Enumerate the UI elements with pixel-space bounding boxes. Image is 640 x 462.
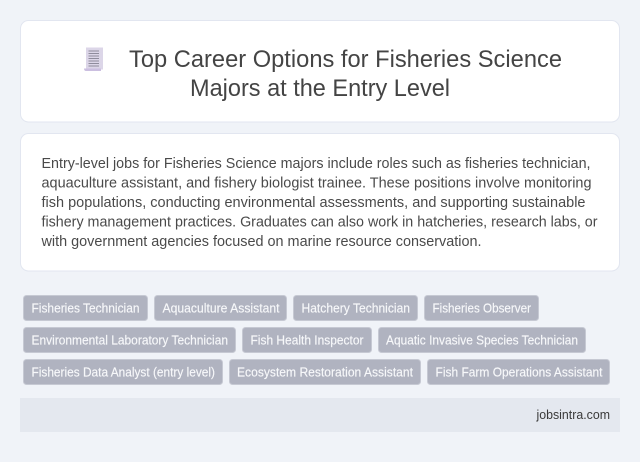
tag: Hatchery Technician	[294, 296, 418, 320]
tag: Aquatic Invasive Species Technician: Aquatic Invasive Species Technician	[386, 332, 578, 348]
title: Majors at the Entry Level	[190, 75, 450, 102]
title	[129, 46, 562, 102]
panel: header	[20, 20, 620, 122]
tag: Aquaculture Assistant: Aquaculture Assistant	[162, 300, 280, 316]
description text	[41, 155, 598, 250]
tag: Fisheries Data Analyst (entry level)	[24, 360, 222, 384]
tag: Aquatic Invasive Species Technician	[378, 328, 586, 352]
tag: Hatchery Technician: Hatchery Technician	[302, 300, 410, 316]
panel: description	[20, 134, 620, 271]
footer source text: jobsintra.com	[536, 408, 610, 422]
description text: fishery management practices. Graduates can also work in hatcheries, research labs, or	[42, 214, 598, 230]
tag: Fish Farm Operations Assistant: Fish Farm Operations Assistant	[436, 364, 603, 380]
description text: with government agencies focused on marine resource conservation.	[41, 233, 481, 250]
tag: Aquaculture Assistant	[154, 296, 286, 320]
description text: aquaculture assistant, and fishery biologist trainee. These positions involve monitoring	[42, 174, 592, 192]
tag: Fish Farm Operations Assistant	[428, 360, 610, 384]
tag: Fisheries Technician	[24, 296, 148, 320]
tag: Ecosystem Restoration Assistant: Ecosystem Restoration Assistant	[237, 364, 413, 380]
tag: Fisheries Technician: Fisheries Technician	[32, 300, 140, 316]
panel: job tags	[24, 296, 610, 384]
tag: Environmental Laboratory Technician	[24, 328, 236, 352]
tag: Ecosystem Restoration Assistant	[230, 360, 420, 384]
tag: Fisheries Observer: Fisheries Observer	[432, 300, 532, 316]
icon: paper scroll	[84, 48, 103, 71]
tag: Environmental Laboratory Technician: Environmental Laboratory Technician	[32, 332, 228, 348]
title: Top Career Options for Fisheries Science	[129, 46, 562, 73]
tag: Fisheries Data Analyst (entry level): Fisheries Data Analyst (entry level)	[32, 364, 215, 380]
footer bar	[20, 398, 620, 432]
tag: Fish Health Inspector	[242, 328, 372, 352]
tag: Fisheries Observer	[424, 296, 538, 320]
description text: Entry-level jobs for Fisheries Science majors include roles such as fisheries technician,	[42, 155, 590, 172]
description text: fish populations, conducting environmental assessments, and supporting sustainable	[42, 194, 586, 211]
tag: Fish Health Inspector: Fish Health Inspector	[250, 332, 364, 348]
